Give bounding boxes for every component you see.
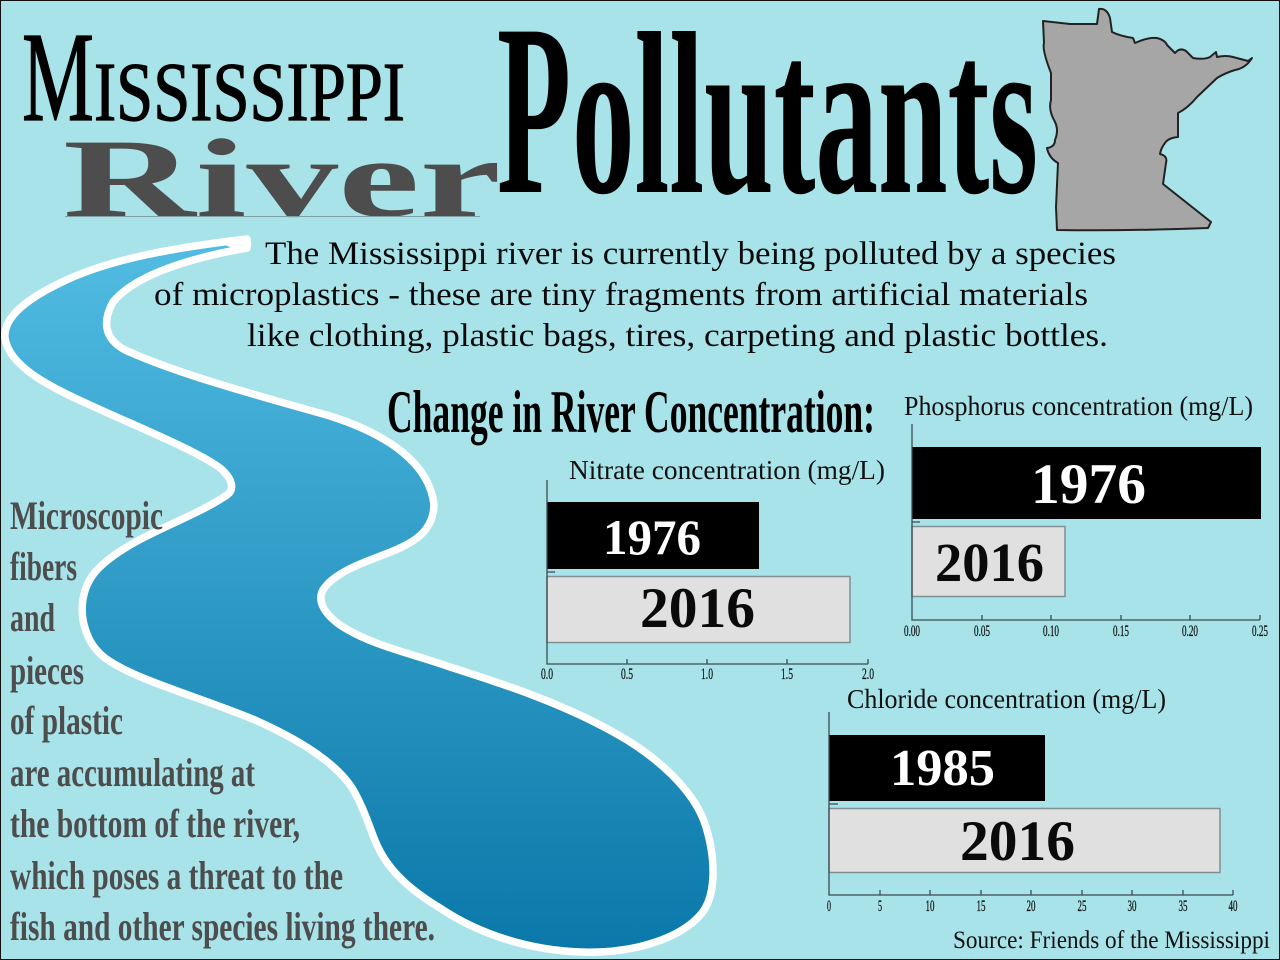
bar label: phosphorus 2016: 2016 xyxy=(935,532,1044,593)
bar: phosphorus 2016 xyxy=(912,526,1065,596)
side text: microscopic fibers: and xyxy=(10,595,55,640)
axis labels: phosphorus: 0.10 xyxy=(1043,623,1059,640)
bar label: chloride 2016: 2016 xyxy=(960,810,1075,873)
side text: microscopic fibers: which poses a threat to the xyxy=(10,853,343,898)
bar label: nitrate 2016: 2016 xyxy=(640,577,755,640)
bar label: nitrate 1976: 1976 xyxy=(603,509,701,565)
title: Mississippi xyxy=(22,6,405,148)
title: Mississippi: M xyxy=(22,6,94,148)
chart: nitrate xyxy=(541,455,885,683)
side text: microscopic fibers: the bottom of the river, xyxy=(10,801,300,846)
chart title: phosphorus: Phosphorus concentration (mg/L) xyxy=(904,391,1253,421)
axis labels: nitrate xyxy=(541,666,874,683)
bar label: phosphorus 1976: 1976 xyxy=(1031,453,1146,516)
bar: chloride 1985 xyxy=(829,735,1045,801)
side text: microscopic fibers: are accumulating at xyxy=(10,750,255,795)
title: Pollutants xyxy=(497,0,1038,245)
title: Mississippi: ISSISSIPPI xyxy=(94,46,405,139)
river illustration xyxy=(5,236,713,952)
side text: microscopic fibers: of plastic xyxy=(10,698,123,743)
side text: microscopic fibers: fibers xyxy=(10,544,77,589)
intro text xyxy=(154,236,1116,354)
chart title: chloride: Chloride concentration (mg/L) xyxy=(847,684,1166,714)
axis labels: chloride: 40 xyxy=(1228,898,1238,915)
axis labels: chloride: 30 xyxy=(1128,898,1136,915)
axis labels: nitrate: 0.5 xyxy=(621,666,633,683)
bar: phosphorus 1976 xyxy=(912,447,1261,519)
axis labels: phosphorus xyxy=(904,623,1268,640)
axis labels: chloride: 35 xyxy=(1178,898,1188,915)
side text: microscopic fibers xyxy=(10,493,435,949)
axis labels: chloride: 20 xyxy=(1026,898,1036,915)
axis labels: nitrate: 1.5 xyxy=(781,666,793,683)
title: River: River xyxy=(63,117,501,241)
heading: change in river concentration: Change in River Concentration: xyxy=(387,379,875,445)
axis labels: phosphorus: 0.25 xyxy=(1252,623,1268,640)
axes: nitrate xyxy=(547,480,868,664)
axes: phosphorus xyxy=(912,424,1260,620)
chart title: nitrate: Nitrate concentration (mg/L) xyxy=(569,455,885,485)
intro text: of microplastics - these are tiny fragments from artificial materials xyxy=(154,277,1088,313)
chart: phosphorus xyxy=(904,391,1268,640)
bar label: chloride 1985: 1985 xyxy=(890,740,995,797)
axis labels: chloride: 25 xyxy=(1078,898,1086,915)
axes: chloride xyxy=(829,712,1233,895)
axis labels: phosphorus: 0.00 xyxy=(904,623,920,640)
axis labels: chloride: 10 xyxy=(926,898,934,915)
axis labels: chloride: 5 xyxy=(878,898,882,915)
bar: nitrate 1976 xyxy=(547,502,759,569)
axis labels: nitrate: 0.0 xyxy=(541,666,553,683)
side text: microscopic fibers: Microscopic xyxy=(10,493,163,538)
icon: Minnesota map xyxy=(1043,9,1252,230)
intro text: like clothing, plastic bags, tires, carpeting and plastic bottles. xyxy=(247,318,1108,354)
bar: chloride 2016 xyxy=(829,808,1220,872)
axis labels: chloride: 0 xyxy=(827,898,831,915)
intro text: The Mississippi river is currently being polluted by a species xyxy=(265,236,1116,272)
chart: chloride xyxy=(827,684,1238,915)
axis labels: nitrate: 2.0 xyxy=(862,666,874,683)
axis labels: phosphorus: 0.05 xyxy=(974,623,990,640)
axis labels: phosphorus: 0.20 xyxy=(1182,623,1198,640)
side text: microscopic fibers: fish and other species living there. xyxy=(10,904,435,949)
axis labels: chloride: 15 xyxy=(976,898,986,915)
bar: nitrate 2016 xyxy=(547,576,850,642)
side text: microscopic fibers: pieces xyxy=(10,648,84,693)
axis labels: phosphorus: 0.15 xyxy=(1113,623,1129,640)
axis labels: nitrate: 1.0 xyxy=(701,666,713,683)
axis labels: chloride xyxy=(827,898,1238,915)
